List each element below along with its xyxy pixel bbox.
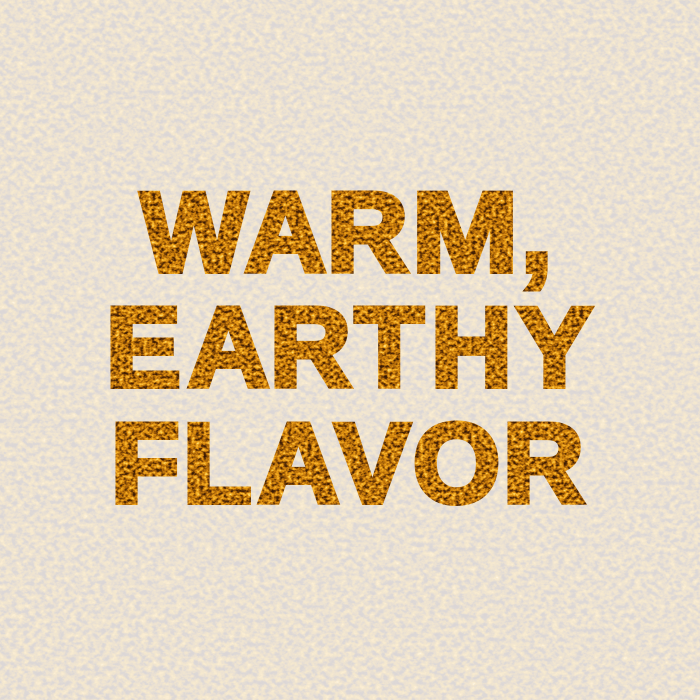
title line: FLAVOR: FLAVOR (111, 401, 584, 526)
title line: WARM,: M (412, 170, 518, 295)
title line: WARM, (141, 170, 552, 295)
title: warm, earthy flavor (106, 170, 592, 526)
title line: WARM,: , (521, 170, 552, 295)
title line: EARTHY: EARTHY (106, 285, 592, 410)
title line: WARM,: WAR (141, 170, 408, 295)
